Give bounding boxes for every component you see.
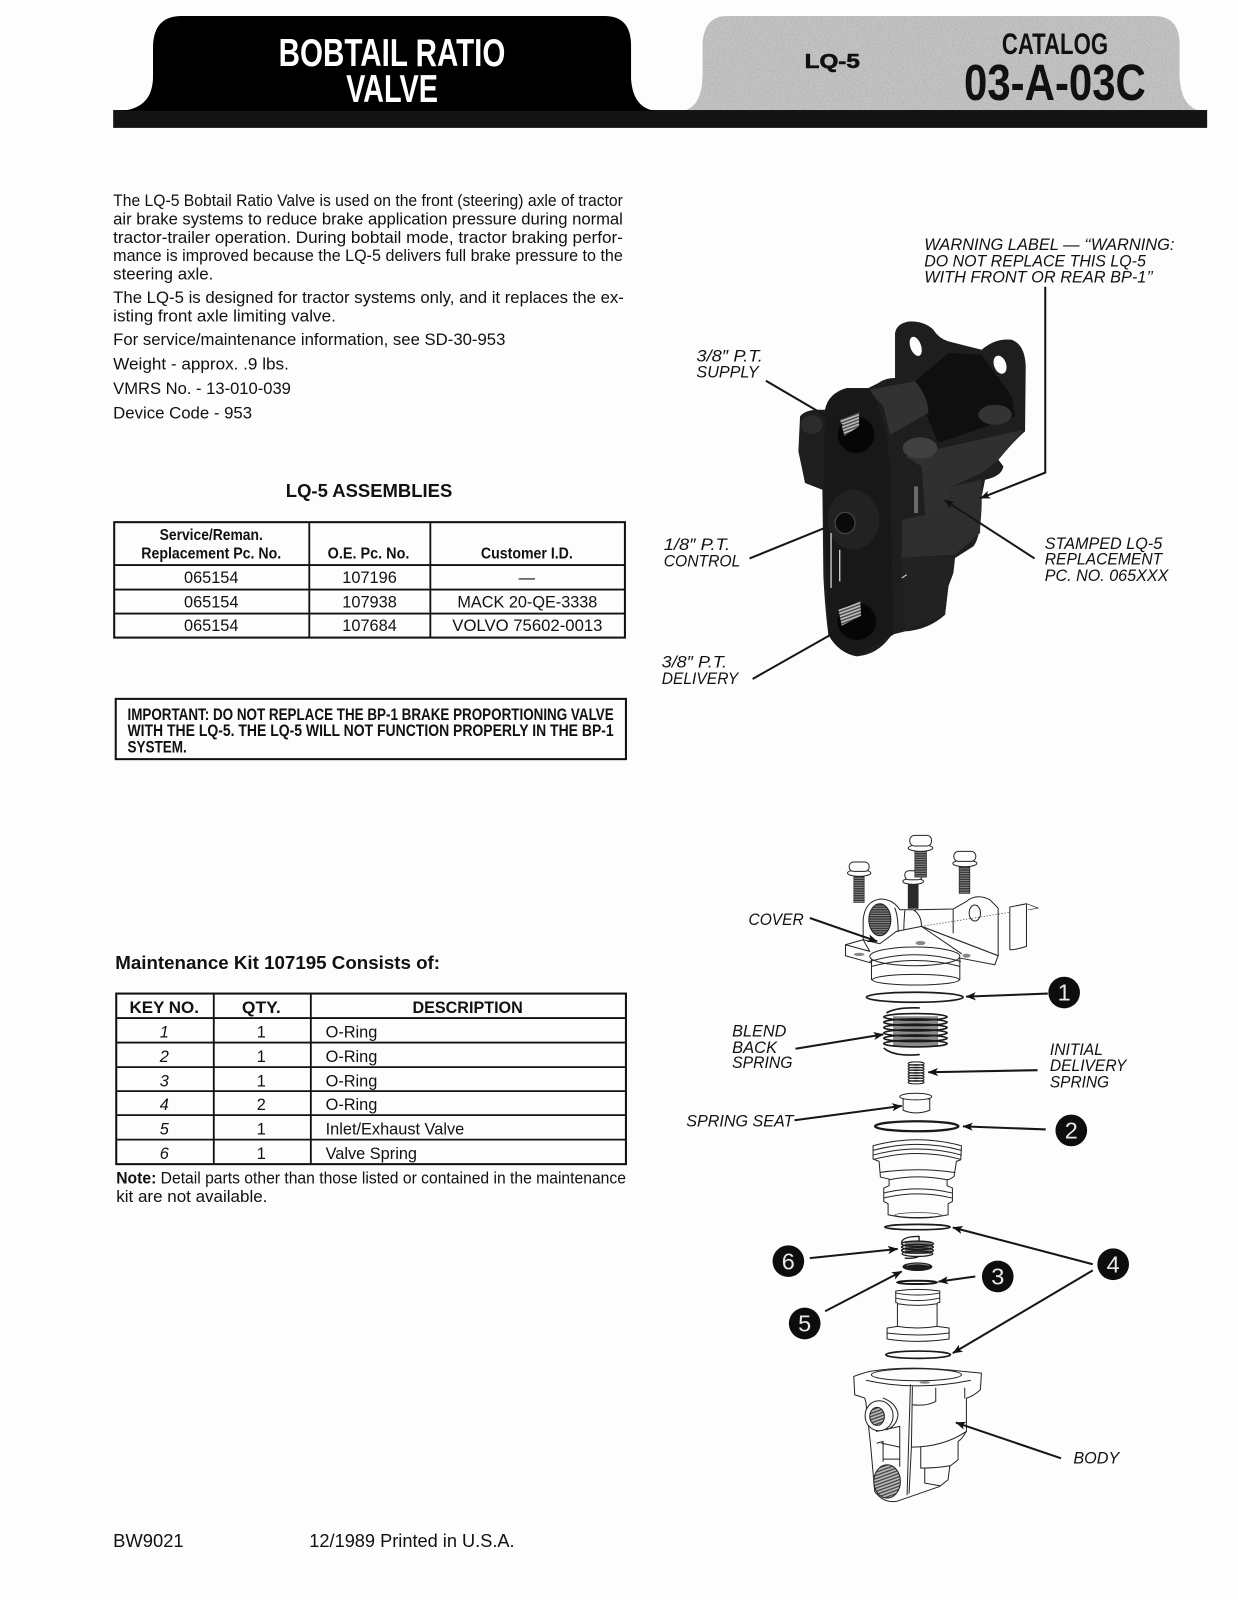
callout: control port xyxy=(664,528,825,571)
blend back spring xyxy=(884,1008,947,1055)
exploded diagram: bolts and cover xyxy=(845,835,1038,985)
callout: blend back spring: BLEND xyxy=(732,1021,786,1040)
initial delivery spring xyxy=(908,1062,924,1084)
table: maintenance kit xyxy=(116,994,626,1164)
table: LQ-5 assemblies: MACK 20-QE-3338 xyxy=(457,593,597,611)
important notice box: IMPORTANT: DO NOT REPLACE THE BP-1 BRAKE PROPORTIONING VALVE xyxy=(127,706,614,724)
exploded diagram: body xyxy=(854,1368,981,1502)
callout: initial delivery spring: INITIAL xyxy=(1050,1040,1103,1059)
table: LQ-5 assemblies: 065154 xyxy=(184,569,238,587)
table: maintenance kit: 1 xyxy=(257,1073,266,1091)
table: LQ-5 assemblies: Service/Reman. xyxy=(160,527,263,544)
table: maintenance kit: 1 xyxy=(257,1023,266,1041)
table: maintenance kit: 4 xyxy=(160,1096,169,1114)
intro text: tractor-trailer operation. During bobtail mode, tractor braking perfor- xyxy=(113,229,623,247)
table: LQ-5 assemblies: Replacement Pc. No. xyxy=(141,545,281,562)
callout: stamped part number: STAMPED LQ-5 xyxy=(1045,534,1163,553)
catalog tab: LQ-5 xyxy=(805,51,860,73)
callout: cover: COVER xyxy=(749,910,804,929)
header bar xyxy=(113,110,1207,128)
table: maintenance kit: 1 xyxy=(160,1023,169,1041)
bolts xyxy=(847,835,977,908)
title tab: VALVE xyxy=(346,68,438,111)
intro text: For service/maintenance information, see SD-30-953 xyxy=(113,331,505,349)
table: maintenance kit: 1 xyxy=(257,1145,266,1163)
exploded diagram: retainer, valve and piston xyxy=(873,1140,961,1358)
cover xyxy=(845,897,1038,985)
key 3 xyxy=(939,1261,1014,1292)
callout: warning label xyxy=(924,235,1174,498)
header banner xyxy=(113,16,1207,128)
callout: body: BODY xyxy=(1073,1448,1121,1467)
key 4 xyxy=(953,1227,1129,1353)
footer: BW9021 xyxy=(113,1530,184,1551)
callout: body xyxy=(956,1423,1121,1467)
key 3: 3 xyxy=(991,1264,1004,1290)
heading: maintenance kit: Maintenance Kit 107195 Consists of: xyxy=(115,952,440,973)
note: kit are not available. xyxy=(116,1188,267,1206)
table: LQ-5 assemblies: 065154 xyxy=(184,593,238,611)
callout: blend back spring: SPRING xyxy=(732,1053,792,1072)
callout: control port: 1/8″ P.T. xyxy=(664,535,730,554)
table: maintenance kit: O-Ring xyxy=(326,1073,377,1091)
callout: stamped part number: PC. NO. 065XXX xyxy=(1045,566,1169,585)
catalog tab: CATALOG xyxy=(1002,28,1108,61)
catalog tab xyxy=(686,16,1197,111)
important notice box: WITH THE LQ-5. THE LQ-5 WILL NOT FUNCTION PROPERLY IN THE BP-1 xyxy=(127,722,614,740)
callout: initial delivery spring: SPRING xyxy=(1050,1073,1109,1092)
table: LQ-5 assemblies: VOLVO 75602-0013 xyxy=(452,617,602,635)
key 5 xyxy=(789,1271,902,1339)
table: maintenance kit: KEY NO. xyxy=(130,999,199,1017)
o-ring 4 lower xyxy=(886,1351,950,1358)
intro text: Device Code - 953 xyxy=(113,404,252,422)
table: LQ-5 assemblies: 107938 xyxy=(342,593,397,611)
note: Note: Detail parts other than those listed or contained in the maintenance xyxy=(116,1170,626,1188)
table: maintenance kit: QTY. xyxy=(242,999,281,1017)
callout: supply port: SUPPLY xyxy=(696,363,760,382)
footer: 12/1989 Printed in U.S.A. xyxy=(309,1530,515,1551)
callout: supply port: 3/8″ P.T. xyxy=(696,346,763,365)
table: LQ-5 assemblies: 107196 xyxy=(342,569,397,587)
table: LQ-5 assemblies: 107684 xyxy=(342,617,397,635)
callout: control port: CONTROL xyxy=(664,552,740,571)
piston xyxy=(887,1289,949,1341)
table: LQ-5 assemblies xyxy=(114,522,625,638)
table: maintenance kit: 1 xyxy=(257,1121,266,1139)
table: maintenance kit: 3 xyxy=(160,1073,169,1091)
key 6 xyxy=(773,1245,898,1277)
intro text: The LQ-5 Bobtail Ratio Valve is used on the front (steering) axle of tractor xyxy=(113,192,623,210)
table: maintenance kit: 2 xyxy=(257,1096,266,1114)
table: maintenance kit: O-Ring xyxy=(326,1048,377,1066)
inlet/exhaust valve xyxy=(902,1262,932,1271)
intro text xyxy=(113,192,624,422)
title tab xyxy=(113,16,656,111)
key 1: 1 xyxy=(1058,980,1071,1006)
intro text: isting front axle limiting valve. xyxy=(113,307,336,325)
table: maintenance kit: 2 xyxy=(159,1048,169,1066)
callout: blend back spring: BACK xyxy=(732,1038,778,1057)
callout: supply port xyxy=(696,346,842,426)
callout: cover xyxy=(749,910,877,941)
retainer xyxy=(873,1140,961,1218)
callout: initial delivery spring: DELIVERY xyxy=(1050,1056,1128,1075)
footer xyxy=(113,1530,515,1551)
table: LQ-5 assemblies: O.E. Pc. No. xyxy=(328,545,409,562)
intro text: VMRS No. - 13-010-039 xyxy=(113,380,291,398)
callout: warning label: WARNING LABEL — ‘‘WARNING: xyxy=(924,235,1174,254)
photo: assembled LQ-5 valve xyxy=(798,321,1026,656)
table: LQ-5 assemblies: — xyxy=(519,569,536,587)
callout: delivery port: 3/8″ P.T. xyxy=(662,653,727,672)
important notice box xyxy=(116,699,626,759)
o-ring 3 xyxy=(897,1281,937,1284)
callout: delivery port xyxy=(662,631,837,688)
table: maintenance kit: 6 xyxy=(160,1145,170,1163)
callout: warning label: DO NOT REPLACE THIS LQ-5 xyxy=(924,251,1146,270)
key 5: 5 xyxy=(798,1311,811,1337)
table: maintenance kit: 5 xyxy=(160,1121,170,1139)
table: maintenance kit: Inlet/Exhaust Valve xyxy=(326,1121,464,1139)
key 2 xyxy=(963,1115,1087,1146)
table: maintenance kit: O-Ring xyxy=(326,1023,377,1041)
callout: delivery port: DELIVERY xyxy=(662,669,740,688)
important notice box: SYSTEM. xyxy=(127,739,187,757)
title tab: BOBTAIL RATIO xyxy=(279,32,505,75)
intro text: mance is improved because the LQ-5 delivers full brake pressure to the xyxy=(113,247,623,265)
key 2: 2 xyxy=(1065,1118,1078,1144)
callout: warning label: WITH FRONT OR REAR BP-1’’ xyxy=(924,268,1153,287)
note xyxy=(116,1170,626,1206)
heading: LQ-5 assemblies: LQ-5 ASSEMBLIES xyxy=(286,480,452,501)
spring seat xyxy=(900,1093,932,1113)
intro text: steering axle. xyxy=(113,266,213,284)
key 6: 6 xyxy=(782,1248,795,1274)
intro text: The LQ-5 is designed for tractor systems only, and it replaces the ex- xyxy=(113,289,624,307)
callout: stamped part number xyxy=(945,500,1169,585)
table: LQ-5 assemblies: 065154 xyxy=(184,617,238,635)
o-ring 1 xyxy=(866,992,963,1002)
valve spring xyxy=(901,1236,933,1258)
catalog tab: 03-A-03C xyxy=(964,54,1146,111)
callout: spring seat: SPRING SEAT xyxy=(686,1111,795,1130)
key 4: 4 xyxy=(1107,1251,1120,1277)
key 1 xyxy=(966,977,1080,1008)
o-ring 2 xyxy=(875,1121,958,1131)
callout: stamped part number: REPLACEMENT xyxy=(1045,550,1164,569)
callout: spring seat xyxy=(686,1106,902,1130)
table: maintenance kit: Valve Spring xyxy=(326,1145,417,1163)
callout: initial delivery spring xyxy=(928,1040,1128,1092)
table: LQ-5 assemblies: Customer I.D. xyxy=(481,545,573,562)
table: maintenance kit: O-Ring xyxy=(326,1096,377,1114)
exploded diagram: o-ring and springs xyxy=(866,992,963,1131)
table: maintenance kit: 1 xyxy=(257,1048,266,1066)
o-ring 4 upper xyxy=(885,1224,950,1230)
callout: blend back spring xyxy=(732,1021,883,1072)
table: maintenance kit: DESCRIPTION xyxy=(412,999,523,1017)
intro text: air brake systems to reduce brake application pressure during normal xyxy=(113,210,623,228)
intro text: Weight - approx. .9 lbs. xyxy=(113,355,289,373)
